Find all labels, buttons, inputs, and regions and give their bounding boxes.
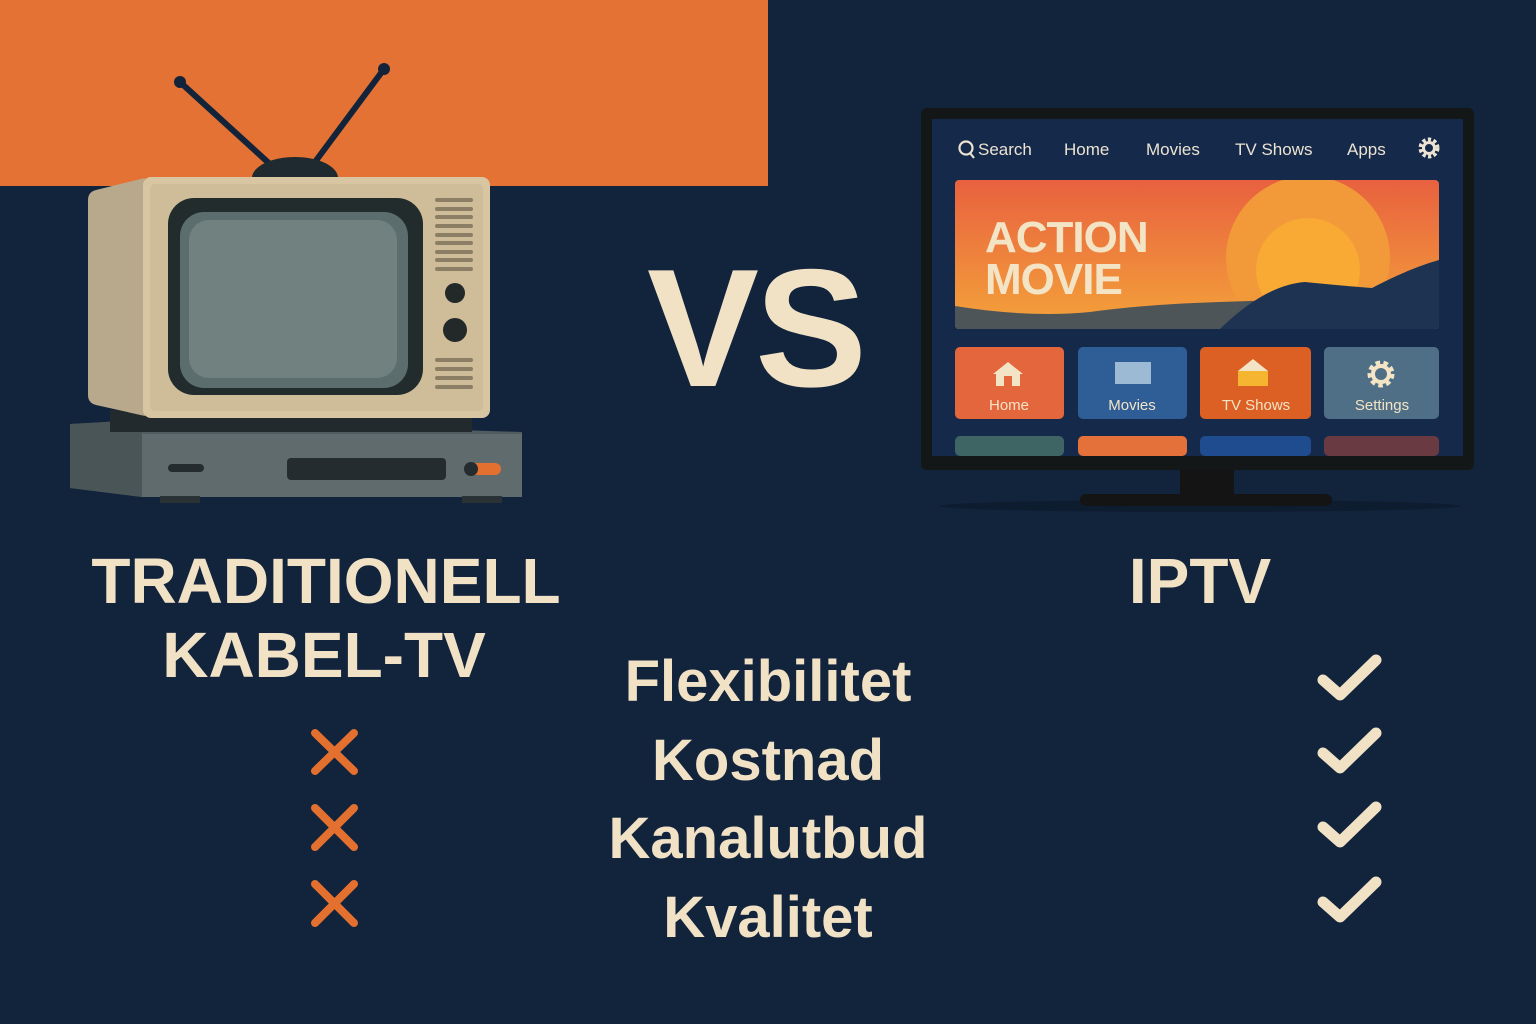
icon: smart TV with IPTV interface (921, 108, 1474, 512)
heading: traditional cable TV: TRADITIONELL (91, 545, 561, 617)
icon: smart TV with IPTV interface: ACTION (985, 213, 1148, 262)
icons: orange crosses (315, 733, 354, 923)
criteria list: Kostnad (652, 728, 884, 793)
icon: smart TV with IPTV interface: MOVIE (985, 255, 1122, 304)
icon: smart TV with IPTV interface: Movies (1146, 140, 1200, 159)
criteria list: Kvalitet (663, 885, 873, 950)
icon: smart TV with IPTV interface: Movies (1108, 397, 1156, 414)
icon: smart TV with IPTV interface: Home (989, 397, 1029, 414)
heading: IPTV: IPTV (1129, 545, 1271, 617)
icons: check marks (1323, 660, 1376, 917)
icon: smart TV with IPTV interface: Home (1064, 140, 1109, 159)
criteria list (609, 649, 927, 950)
icon: smart TV with IPTV interface: Settings (1355, 397, 1409, 414)
VS heading: VS (647, 234, 863, 422)
icon: smart TV with IPTV interface: Search (978, 140, 1032, 159)
icon: smart TV with IPTV interface: TV Shows (1222, 397, 1290, 414)
heading: traditional cable TV: KABEL-TV (162, 619, 486, 691)
icon: old CRT television with set-top box (70, 63, 522, 503)
orange header block (0, 0, 768, 186)
icon: smart TV with IPTV interface: TV Shows (1235, 140, 1312, 159)
heading: traditional cable TV (91, 545, 561, 691)
icon: smart TV with IPTV interface: Apps (1347, 140, 1386, 159)
criteria list: Kanalutbud (609, 806, 927, 871)
criteria list: Flexibilitet (625, 649, 911, 714)
